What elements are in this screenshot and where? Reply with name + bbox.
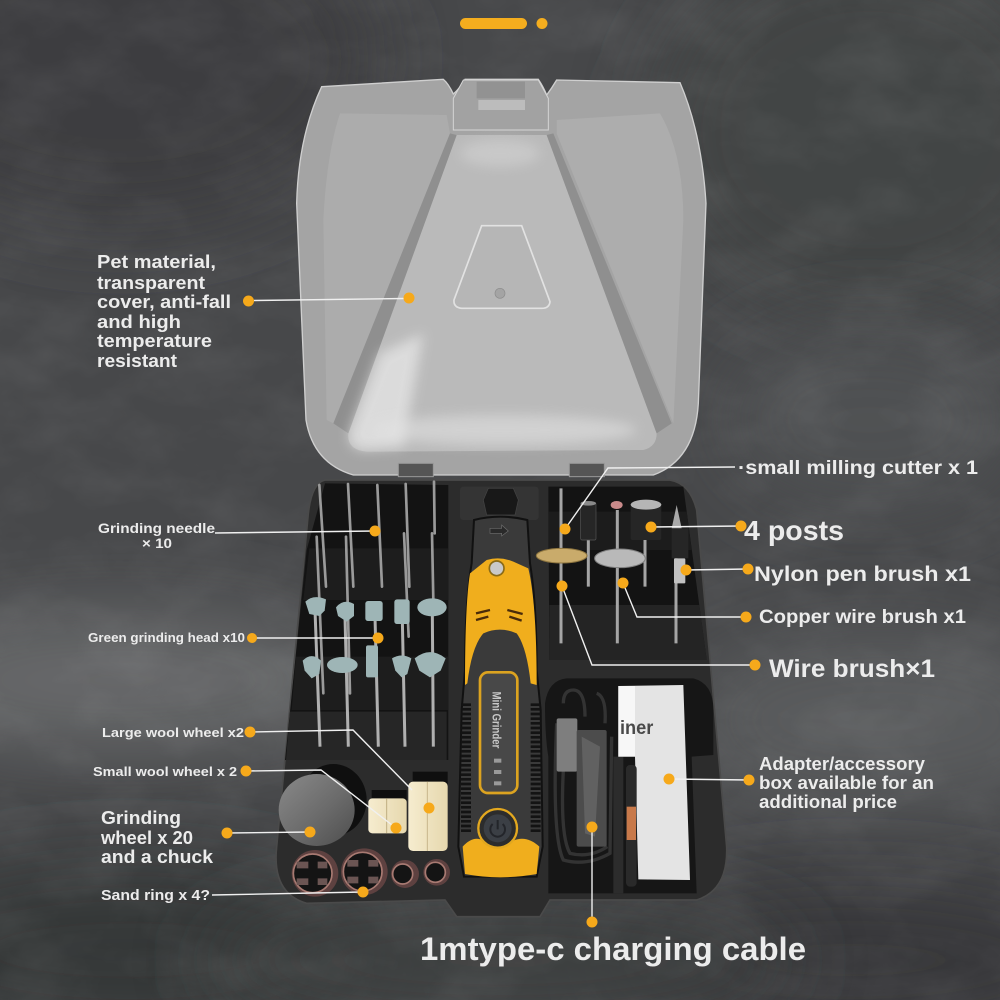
- grinding needles: [317, 482, 435, 693]
- callout: adapter box: Adapter/accessory: [759, 754, 925, 774]
- lid: left pane: [323, 113, 450, 423]
- case body: [276, 480, 727, 917]
- grinder rear grips: [466, 703, 536, 833]
- cable package: [557, 718, 607, 847]
- copper wire brush: [595, 549, 645, 568]
- lid: screw mark: [495, 288, 505, 298]
- callout: wire brush: Wire brush×1: [769, 655, 935, 683]
- sand rings: [292, 848, 450, 897]
- callout: adapter box: [664, 754, 934, 812]
- grinder yellow base: [463, 839, 539, 877]
- top accent: yellow pill and dot: [460, 18, 548, 29]
- grinder label panel: [480, 672, 517, 793]
- brass wire brush: [536, 548, 587, 563]
- green grinding heads: [303, 597, 447, 747]
- callout: lid material: cover, anti-fall: [97, 292, 231, 312]
- callout: sand ring: Sand ring x 4?: [101, 888, 210, 904]
- lid: hinge clips: [398, 463, 604, 477]
- grinder collet: [483, 488, 518, 515]
- small wool wheels: [368, 790, 407, 833]
- accessory box and manual: iner: [620, 718, 654, 739]
- grinder yellow shell: [465, 558, 537, 685]
- callout: grinding wheel and chuck: and a chuck: [101, 847, 214, 867]
- nylon pen brush: [672, 505, 688, 583]
- large wool wheels: [408, 772, 448, 851]
- callout: green grinding head: Green grinding head x10: [88, 631, 245, 645]
- callout: large wool wheel: Large wool wheel x2: [102, 725, 244, 740]
- accessory box and manual: [618, 685, 690, 880]
- upper right tools: [536, 488, 688, 643]
- large black post: [631, 500, 661, 540]
- grinder vents: [476, 610, 523, 621]
- grinder arrow mark: [490, 525, 508, 536]
- grinder power button: [478, 809, 517, 848]
- lid: central trapezoid: [348, 135, 657, 452]
- callout: grinding wheel and chuck: Grinding: [101, 808, 181, 828]
- pen: [626, 765, 637, 887]
- callout: small milling cutter: ·small milling cutter x 1: [738, 458, 978, 479]
- callout: copper wire brush: [618, 578, 966, 628]
- grinding wheel container: [279, 764, 367, 846]
- callout: lid material: Pet material,: [97, 252, 216, 272]
- callout: large wool wheel: [102, 725, 434, 814]
- lid: bright reflections: [350, 140, 637, 450]
- grinder bay: [460, 487, 539, 520]
- callout: nylon pen brush: [680, 563, 971, 586]
- grinder label panel: Mini Grinder: [490, 692, 503, 749]
- callout: green grinding head: [88, 631, 384, 645]
- lower right well: [545, 678, 713, 893]
- tool case: [276, 480, 727, 917]
- callout: grinding wheel and chuck: [100, 808, 316, 867]
- small black cylinder: [581, 501, 596, 540]
- grinder light: [489, 561, 504, 576]
- callout: lid material: and high: [97, 312, 181, 332]
- callout: grinding needle: Grinding needle: [98, 520, 215, 536]
- callout: grinding wheel and chuck: wheel x 20: [100, 828, 193, 848]
- callout: small wool wheel: [93, 764, 402, 834]
- callout: lid material: resistant: [97, 351, 177, 371]
- callout: small milling cutter: [560, 458, 978, 534]
- callout: small wool wheel: Small wool wheel x 2: [93, 764, 237, 779]
- lid: left rib: [333, 133, 457, 433]
- callout: charging cable: 1mtype-c charging cable: [420, 931, 806, 967]
- callout: wire brush: [556, 580, 935, 683]
- grinder body: [458, 488, 543, 877]
- lid: right pane: [557, 113, 683, 423]
- callout: lid material: transparent: [97, 273, 205, 293]
- left well: [285, 483, 448, 760]
- callout: lid material: temperature: [97, 331, 212, 351]
- callout: sand ring: [101, 886, 368, 904]
- callout: adapter box: box available for an: [759, 773, 934, 793]
- lid: hinge tab: [453, 80, 548, 130]
- callout: 4 posts: 4 posts: [744, 515, 844, 546]
- callout: copper wire brush: Copper wire brush x1: [759, 606, 966, 628]
- lid: right rib: [547, 133, 672, 433]
- upper right well: [548, 487, 707, 660]
- callout: charging cable: [420, 822, 806, 967]
- transparent lid: [297, 79, 706, 477]
- callout: grinding needle: [98, 520, 380, 551]
- grinder housing: [458, 517, 543, 877]
- callout: adapter box: additional price: [759, 792, 897, 812]
- pink disc: [611, 501, 623, 509]
- lid: trapezoid emboss: [454, 226, 550, 308]
- coiled charging cable: [555, 690, 612, 862]
- divider post: [613, 757, 623, 893]
- callout: lid material: [97, 252, 414, 371]
- callout: 4 posts: [646, 515, 844, 546]
- callout: nylon pen brush: Nylon pen brush x1: [754, 563, 971, 586]
- callout: grinding needle: × 10: [142, 535, 172, 551]
